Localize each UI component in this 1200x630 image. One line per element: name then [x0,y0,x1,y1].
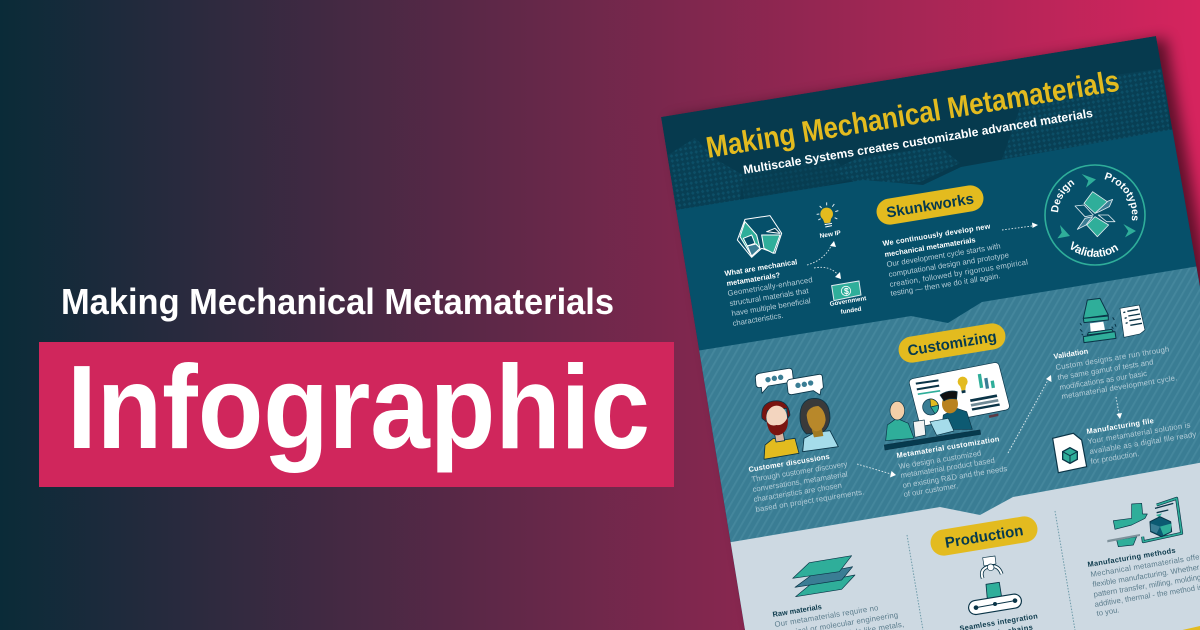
text block: manufacturing file: available as a digital file ready [1089,430,1197,456]
diagram: design prototypes validation cycle: Design [1050,180,1074,212]
text block: validation: the same gamut of tests and [1057,357,1154,382]
text block: metamaterial customization: on existing R&D and the needs [902,464,1008,490]
text block: manufacturing methods: Mechanical metamaterials offer [1090,552,1200,579]
text block: customer discussions: characteristics are chosen [753,481,842,504]
text block: metamaterial customization: Metamaterial customization [896,434,1000,460]
text block: customer discussions: based on project requirements. [755,487,865,514]
text block: we continuously develop: Our development cycle starts with [886,241,1001,269]
skunkworks heading pill: Skunkworks [885,190,975,222]
label: government funded: Government [829,295,868,308]
heading: making mechanical metamaterials: Making Mechanical Metamaterials [61,281,614,322]
panel: tilted infographic poster [661,36,1200,630]
icon: digital file [1053,433,1087,473]
title: Making Mechanical Metamaterials [704,65,1122,165]
text block: what are mechanical metamaterials: characteristics. [732,311,784,328]
arrow: to manufacturing file [1116,397,1122,419]
text block: we continuously develop: testing — then we do it all again. [890,271,1001,298]
text block: what are mechanical metamaterials: structural materials that [729,286,810,308]
arrow: to government funded [814,267,838,275]
text block: manufacturing file: Manufacturing file [1086,416,1154,436]
arrow: to new ip [807,244,832,265]
diagram: design prototypes validation cycle: Prototypes [1104,172,1138,221]
text block: what are mechanical metamaterials [724,257,813,328]
text block: customer discussions [748,452,865,514]
text block: metamaterial customization: We design a customized [898,449,982,471]
label: government funded [830,296,866,314]
text block: customer discussions: Through customer discovery [751,459,848,484]
icon: metamaterial cube [737,216,782,257]
text block: we continuously develop: We continuously develop new [882,221,991,248]
panel: skunkworks [670,129,1200,630]
text block: metamaterial customization: of our customer. [903,481,959,499]
text block: validation: modifications as our basic [1059,369,1148,392]
text block: metamaterial customization [896,434,1008,499]
label: new ip: New IP [819,230,842,240]
subtitle: Multiscale Systems creates customizable advanced materials [742,106,1094,177]
arrow: to customization [857,464,896,478]
text block: metamaterial customization: metamaterial product based [900,456,995,480]
text block: we continuously develop: mechanical metamaterials [884,235,976,259]
panel: header band [661,36,1200,630]
diagram: design prototypes validation cycle [1044,164,1146,266]
label: government funded: funded [840,306,862,316]
arrow: to cycle [1002,222,1038,230]
icon: light bulb [817,202,838,227]
banner: infographic: Infographic [67,341,650,474]
text block: we continuously develop: creation, followed by rigorous empirical [889,257,1029,289]
text block: validation: Validation [1053,346,1089,361]
text block: validation: metamaterial development cycle. [1061,373,1178,401]
text block: what are mechanical metamaterials: Geometrically-enhanced [727,275,813,298]
text block: validation [1053,345,1178,401]
customizing heading pill: Customizing [906,328,998,360]
icon: banknote [832,281,861,301]
text block: manufacturing methods: Manufacturing methods [1087,546,1176,569]
next heading pill, cropped [1178,626,1200,630]
text block: raw materials: Our metamaterials require no [774,603,879,629]
divider lines [907,511,1075,630]
text block: manufacturing methods: flexible manufacturing. Whether [1092,563,1200,589]
panel: customizing [690,265,1200,630]
customizing heading pill [898,323,1006,363]
arrow head: funded [835,272,841,279]
text block: what are mechanical metamaterials: have multiple beneficial [731,296,811,318]
arrow head: new ip [830,241,836,247]
arrow: to validation [1008,375,1052,453]
text block: manufacturing file: for production. [1090,449,1140,466]
icon: robot gripper and conveyor [968,556,1022,616]
icon: manufacturing methods [1107,498,1182,547]
text block: manufacturing methods [1087,546,1200,618]
diagram: design prototypes validation cycle: Validation [1070,241,1118,257]
text block: customer discussions: Customer discussions [748,452,830,474]
text block: manufacturing file: Your metamaterial solution is [1087,420,1191,446]
poster shadow [671,38,1200,630]
text block: what are mechanical metamaterials: metamaterials? [726,270,781,288]
production heading pill [930,516,1038,556]
panel: production [720,460,1200,630]
text block: raw materials: Raw materials [772,602,822,619]
icon: raw material layers [793,556,855,597]
production heading pill: Production [944,522,1025,552]
text block: manufacturing file [1086,418,1196,464]
text block: customer discussions: conversations, metamaterial [752,470,848,494]
text block: we continuously develop [882,221,1029,298]
skunkworks heading pill [876,185,984,225]
text block: what are mechanical metamaterials: What are mechanical [724,257,798,278]
text block: manufacturing methods: to you. [1096,605,1120,618]
icon: testing press [1080,298,1116,343]
icon: checklist [1120,305,1145,337]
icon: banknote: $ [844,286,849,296]
text block: validation: Custom designs are run through [1055,345,1170,372]
text block: we continuously develop: computational design and prototype [888,250,1010,279]
illustration: metamaterial customization team [884,363,1009,450]
illustration: customer discussions people [755,368,838,459]
